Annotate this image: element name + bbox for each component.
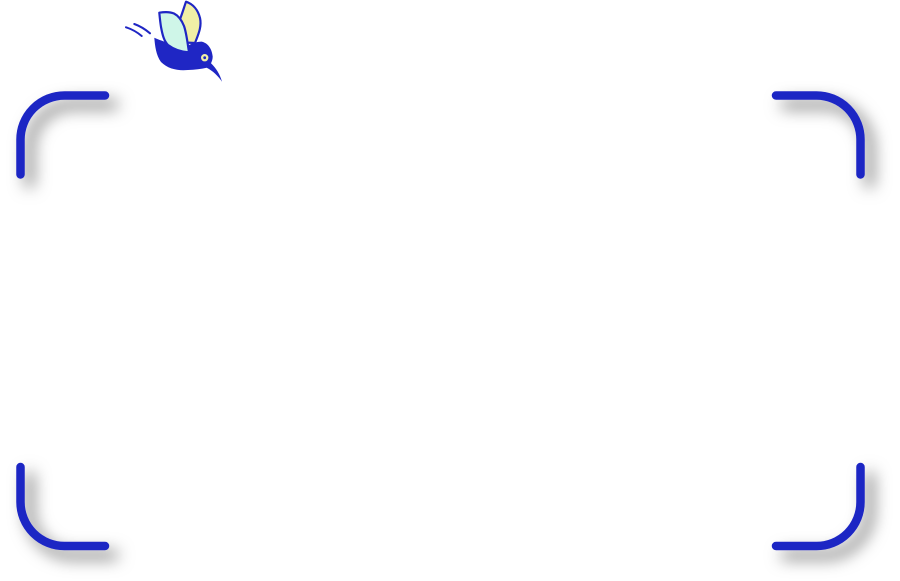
eye [201,54,208,61]
corner bracket: bottom left [20,467,105,546]
corner bracket: top right [776,96,861,174]
corner bracket: bottom right [776,467,860,546]
front wing [159,12,189,52]
icon: hummingbird [126,2,222,82]
back wing [174,2,201,43]
motion lines [126,24,150,36]
body and beak [154,38,222,82]
corner bracket: top left [20,96,105,174]
